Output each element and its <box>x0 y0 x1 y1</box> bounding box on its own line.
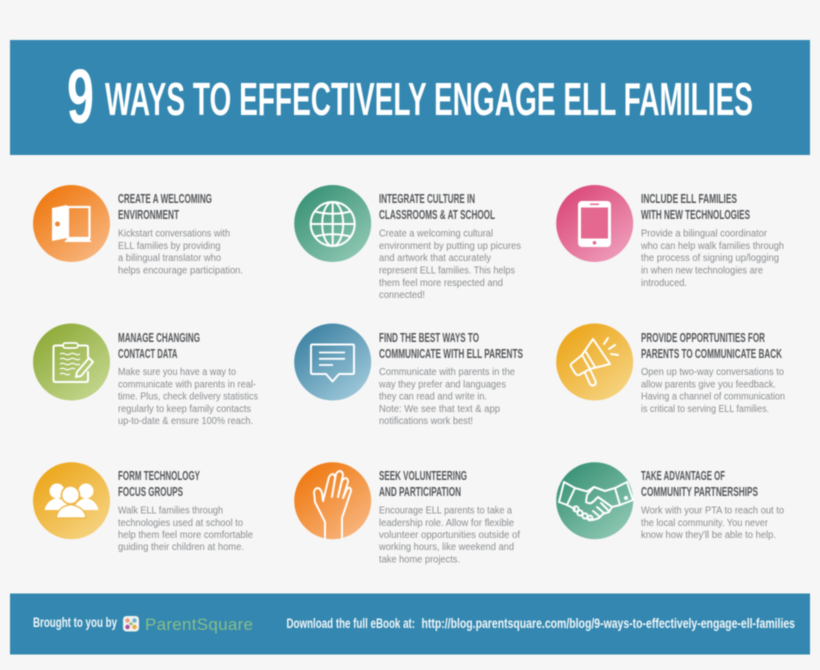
body text: Create a welcoming cultural <box>379 228 493 240</box>
panel: create a welcoming environment <box>33 185 243 276</box>
body text: Communicate with parents in the <box>379 367 515 378</box>
body text: environment by putting up picures <box>379 241 521 252</box>
body text <box>118 506 253 553</box>
icon: ParentSquare logo <box>123 616 139 632</box>
body text: is critical to serving ELL families. <box>641 404 769 415</box>
body text <box>640 228 784 289</box>
body text: connected! <box>379 290 425 301</box>
body text: the local community. You never <box>641 518 769 529</box>
body text: working hours, like weekend and <box>378 542 514 553</box>
icon: clipboard <box>33 324 110 400</box>
download label: Download the full eBook at: <box>286 615 415 631</box>
heading <box>379 191 495 222</box>
icon: globe <box>294 185 371 262</box>
heading <box>379 330 523 361</box>
panel: seek volunteering <box>294 462 520 566</box>
body text: the process of signing up/logging <box>641 253 779 264</box>
body text: Note: We see that text & app <box>379 404 500 415</box>
heading: AND PARTICIPATION <box>379 484 461 499</box>
heading <box>379 468 467 499</box>
body text: take home projects. <box>379 554 460 566</box>
body text: Work with your PTA to reach out to <box>641 506 784 516</box>
heading: SEEK VOLUNTEERING <box>379 468 467 483</box>
body text: allow parents give you feedback. <box>641 380 776 390</box>
body text: time. Plus, check delivery statistics <box>118 392 258 402</box>
body text: volunteer opportunities outside of <box>379 530 520 541</box>
heading: INCLUDE ELL FAMILIES <box>641 191 737 206</box>
body text: Make sure you have a way to <box>118 367 236 378</box>
panel: find the best ways to communicate <box>294 324 523 427</box>
body text <box>118 228 243 276</box>
body text: they can read and write in. <box>379 392 487 402</box>
panel: form technology focus groups <box>33 462 253 553</box>
heading: FIND THE BEST WAYS TO <box>379 330 479 345</box>
heading: WITH NEW TECHNOLOGIES <box>641 207 750 222</box>
body text: introduced. <box>641 278 687 289</box>
body text: Encourage ELL parents to take a <box>379 506 512 516</box>
heading <box>641 191 750 222</box>
panel: include ELL families with new technologies <box>556 185 784 289</box>
body text: way they prefer and languages <box>378 380 506 390</box>
heading: ENVIRONMENT <box>118 207 179 222</box>
body text: guiding their children at home. <box>118 542 244 553</box>
body text: leadership role. Allow for flexible <box>379 518 514 529</box>
heading <box>118 468 200 499</box>
body text: regularly to keep family contacts <box>118 404 251 415</box>
body text: know how they'll be able to help. <box>641 530 776 541</box>
icon: door <box>33 185 110 262</box>
body text: notifications work best! <box>379 416 473 427</box>
icon: handshake <box>556 462 633 539</box>
heading: INTEGRATE CULTURE IN <box>379 191 475 206</box>
body text: help them feel more comfortable <box>118 530 253 541</box>
header banner <box>10 40 810 155</box>
footer banner <box>10 594 810 654</box>
body text <box>379 228 521 301</box>
icon: raised hand <box>294 462 371 539</box>
body text <box>641 506 784 541</box>
panel: provide opportunities <box>556 324 785 415</box>
heading: FOCUS GROUPS <box>118 484 183 499</box>
body text: up-to-date & ensure 100% reach. <box>118 416 253 427</box>
heading: CREATE A WELCOMING <box>118 191 212 206</box>
body text: communicate with parents in real- <box>118 380 256 390</box>
panel: community partnerships <box>556 462 784 541</box>
icon: smartphone <box>556 185 633 262</box>
heading <box>118 330 200 361</box>
title numeral: 9 <box>67 54 94 140</box>
body text: Walk ELL families through <box>118 506 223 516</box>
heading: CONTACT DATA <box>118 346 178 361</box>
heading: COMMUNICATE WITH ELL PARENTS <box>379 346 523 361</box>
icon: megaphone <box>556 324 633 400</box>
body text <box>118 367 258 427</box>
body text <box>378 367 515 427</box>
body text <box>641 367 785 415</box>
heading: CLASSROOMS & AT SCHOOL <box>379 207 495 222</box>
heading: COMMUNITY PARTNERSHIPS <box>641 484 758 499</box>
ParentSquare wordmark: ParentSquare <box>145 615 253 634</box>
body text: in when new technologies are <box>641 266 763 276</box>
body text: Open up two-way conversations to <box>641 367 784 378</box>
icon: speech bubble <box>294 324 371 400</box>
body text: Kickstart conversations with <box>118 228 230 240</box>
body text: ELL families by providing <box>118 241 220 252</box>
body text: technologies used at school to <box>118 518 243 529</box>
heading <box>641 330 782 361</box>
heading: TAKE ADVANTAGE OF <box>641 468 725 483</box>
panel: integrate culture <box>294 185 521 301</box>
icon: group of people <box>33 462 110 539</box>
heading <box>118 191 212 222</box>
body text <box>378 506 520 566</box>
heading: MANAGE CHANGING <box>118 330 200 345</box>
heading: FORM TECHNOLOGY <box>118 468 200 483</box>
brought to you by: Brought to you by <box>33 614 117 630</box>
body text: Having a channel of communication <box>641 392 785 402</box>
body text: them feel more respected and <box>379 278 503 289</box>
body text: a bilingual translator who <box>118 253 221 264</box>
body text: who can help walk families through <box>640 241 784 252</box>
panel: manage changing contact data <box>33 324 258 427</box>
body text: and artwork that accurately <box>379 253 491 264</box>
heading <box>641 468 758 499</box>
body text: helps encourage participation. <box>118 266 243 276</box>
body text: represent ELL families. This helps <box>379 266 515 276</box>
body text: Provide a bilingual coordinator <box>641 228 768 240</box>
